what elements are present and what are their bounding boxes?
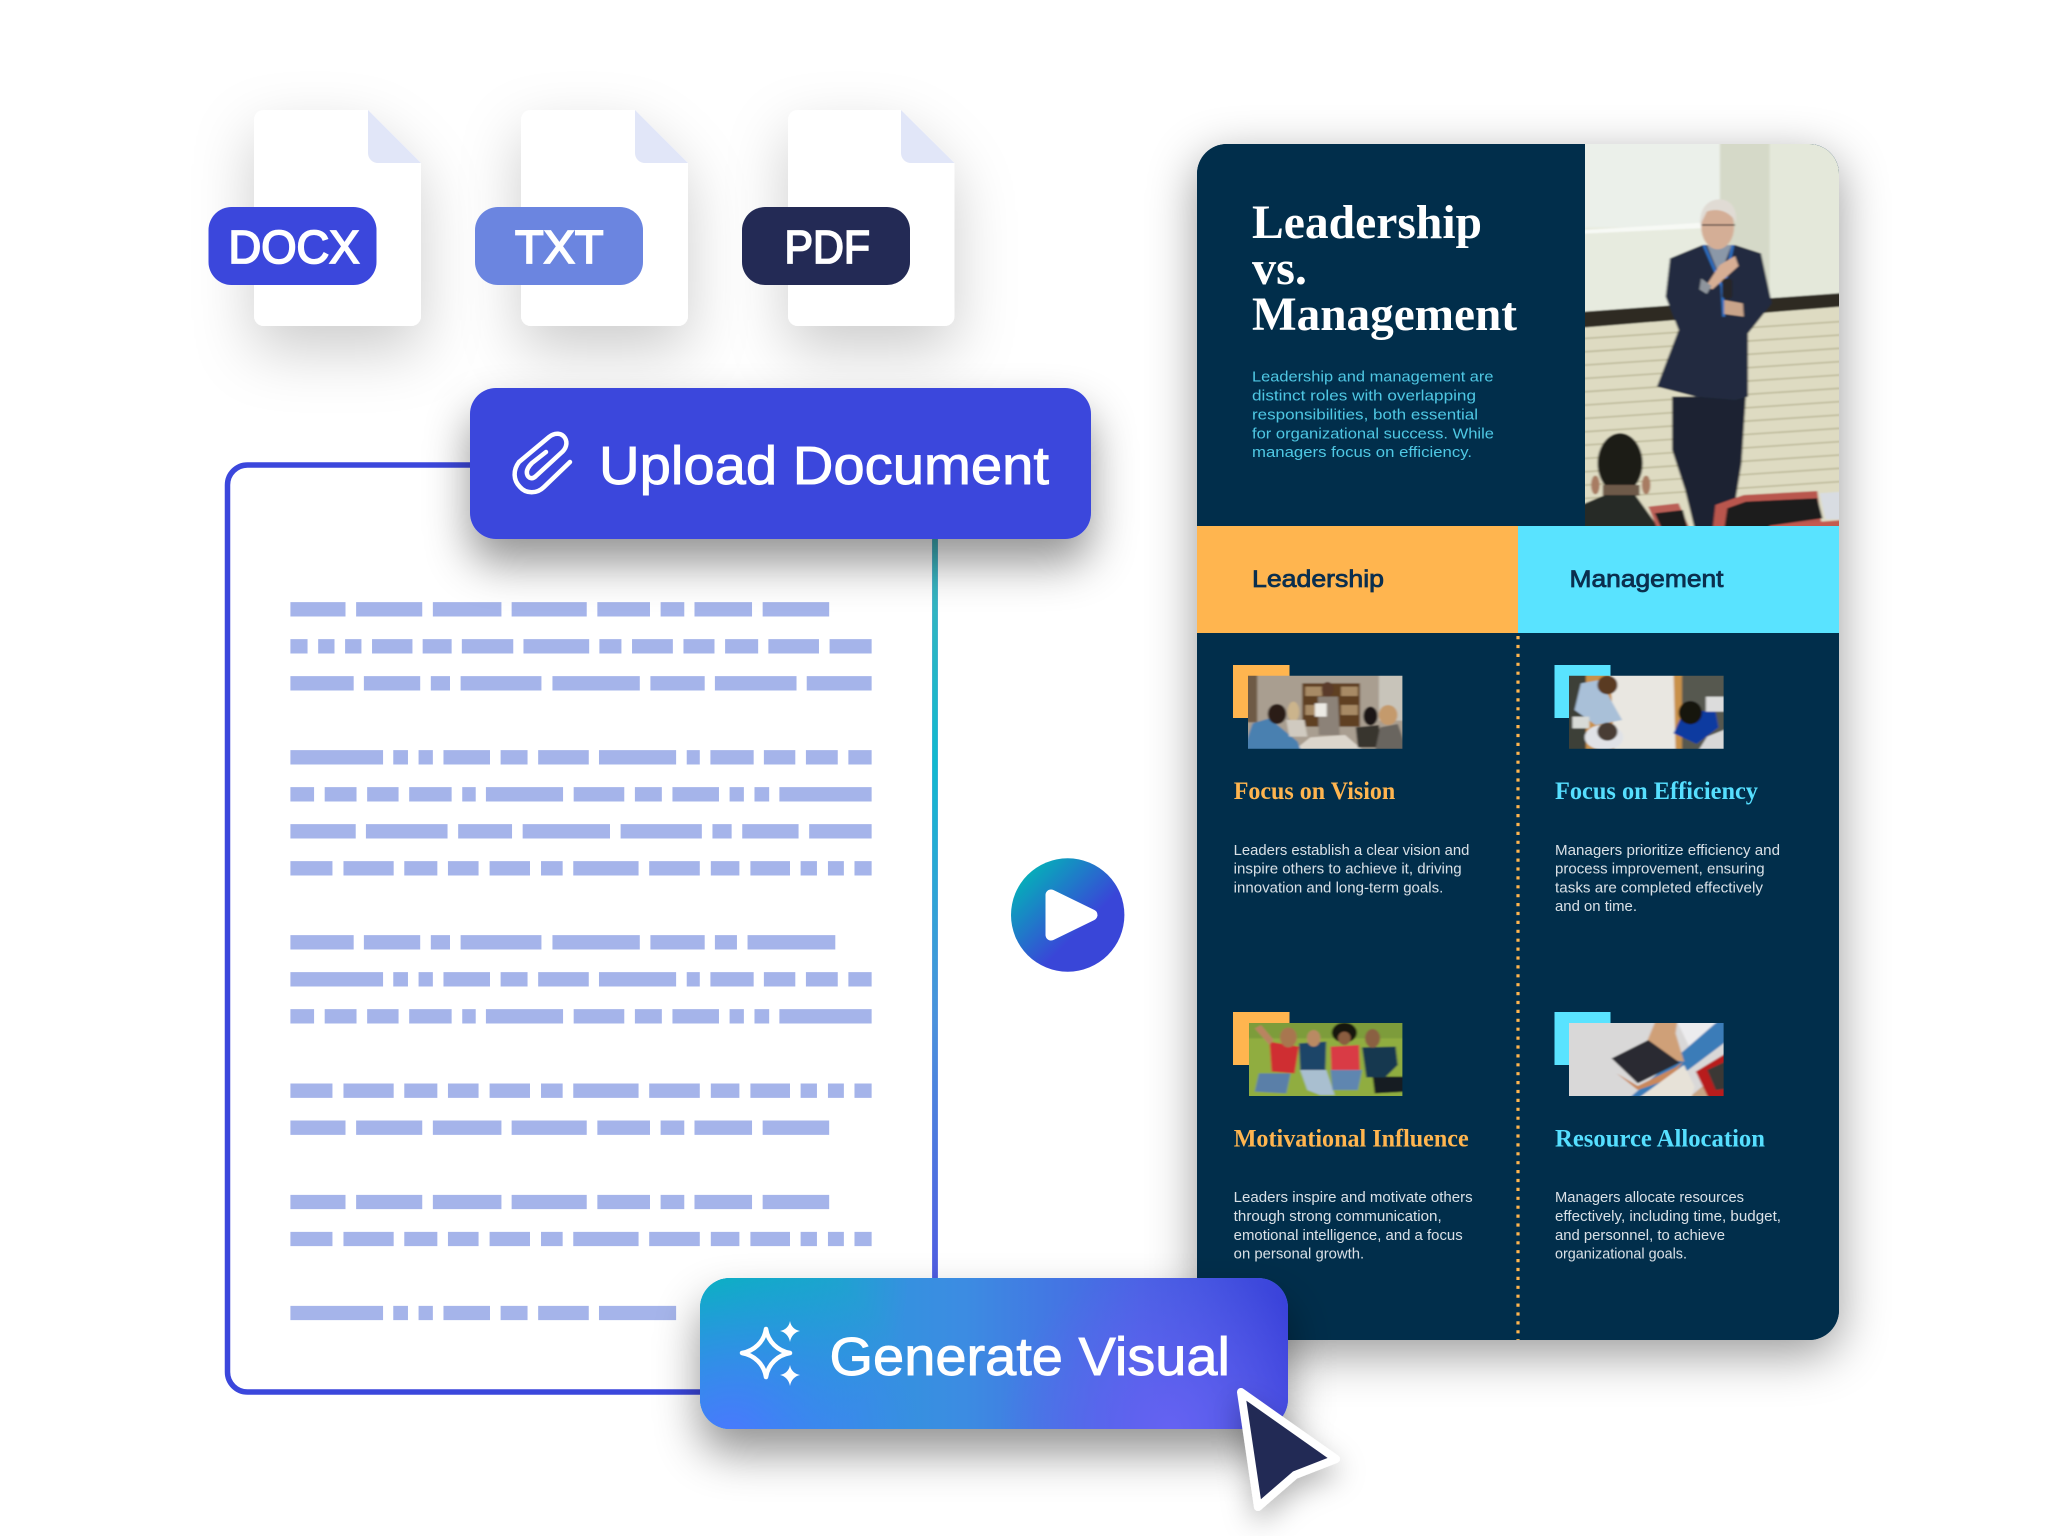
section: focus on efficiency <box>1554 665 1780 915</box>
text: efficiency description: process improvement, ensuring <box>1555 862 1765 878</box>
text: vision description <box>1234 843 1469 897</box>
icon: DOCX file <box>208 110 421 326</box>
icon: TXT file <box>475 110 688 326</box>
header band: leadership <box>1197 526 1518 633</box>
text: motivation description: Leaders inspire and motivate others <box>1234 1190 1473 1206</box>
photo: team around table from above <box>1554 665 1730 753</box>
icon: sparkles <box>742 1321 800 1386</box>
text: motivation description <box>1234 1190 1473 1263</box>
intro paragraph: responsibilities, both essential <box>1252 408 1478 424</box>
intro paragraph <box>1252 370 1494 461</box>
text: efficiency description <box>1555 843 1780 915</box>
icon: paperclip <box>515 434 570 492</box>
header band: management: Management <box>1570 566 1724 593</box>
card title <box>1252 196 1517 341</box>
card title: Leadership <box>1252 196 1482 249</box>
icon: PDF file <box>742 110 954 326</box>
text: motivation description: emotional intelligence, and a focus <box>1234 1228 1463 1244</box>
section: focus on vision <box>1233 665 1469 897</box>
intro paragraph: Leadership and management are <box>1252 370 1494 386</box>
text: motivation description: on personal growth. <box>1234 1247 1364 1263</box>
section: resource allocation <box>1554 1012 1781 1263</box>
icon: play button <box>1011 858 1124 972</box>
text: resource description <box>1555 1190 1781 1263</box>
icon: TXT file: TXT <box>515 221 604 273</box>
infographic canvas <box>208 106 1871 1530</box>
heading: motivational influence: Motivational Influence <box>1234 1126 1469 1153</box>
text: vision description: inspire others to achieve it, driving <box>1234 862 1462 878</box>
text: resource description: Managers allocate resources <box>1555 1190 1744 1206</box>
header band: leadership: Leadership <box>1252 566 1384 593</box>
card title: vs. <box>1252 242 1307 295</box>
text: efficiency description: and on time. <box>1555 899 1637 915</box>
card title: Management <box>1252 288 1517 341</box>
text: resource description: organizational goals. <box>1555 1247 1687 1263</box>
icon: PDF file: PDF <box>784 221 870 273</box>
document text placeholder lines <box>290 609 872 1313</box>
section: motivational influence <box>1233 1012 1473 1263</box>
panel: document outline <box>228 465 935 1392</box>
text: resource description: effectively, including time, budget, <box>1555 1209 1781 1225</box>
heading: focus on efficiency: Focus on Efficiency <box>1555 778 1758 805</box>
card background <box>1197 144 1839 1340</box>
heading: resource allocation: Resource Allocation <box>1555 1126 1765 1153</box>
intro paragraph: for organizational success. While <box>1252 426 1494 442</box>
generate label: Generate Visual <box>830 1327 1230 1387</box>
panel: generated infographic card <box>1197 130 1865 1340</box>
text: efficiency description: Managers prioritize efficiency and <box>1555 843 1780 859</box>
intro paragraph: distinct roles with overlapping <box>1252 388 1476 404</box>
icon: DOCX file: DOCX <box>228 221 360 273</box>
button: generate visual <box>700 1278 1288 1429</box>
photo: team meeting <box>1233 665 1408 753</box>
file type icons <box>208 110 954 326</box>
text: motivation description: through strong communication, <box>1234 1209 1442 1225</box>
button: upload document <box>470 388 1091 539</box>
text: efficiency description: tasks are completed effectively <box>1555 881 1764 897</box>
text: resource description: and personnel, to achieve <box>1555 1228 1725 1244</box>
hero photo: speaker in lecture hall <box>1585 144 1839 526</box>
photo: group sitting on grass <box>1233 1012 1408 1102</box>
intro paragraph: managers focus on efficiency. <box>1252 445 1472 461</box>
upload label: Upload Document <box>599 436 1049 496</box>
text: vision description: Leaders establish a clear vision and <box>1234 843 1469 859</box>
dotted column divider <box>1516 636 1520 1340</box>
text: vision description: innovation and long-term goals. <box>1234 881 1443 897</box>
header band: management <box>1518 526 1840 633</box>
icon: cursor arrow <box>1241 1392 1336 1507</box>
heading: focus on vision: Focus on Vision <box>1234 778 1395 805</box>
photo: calculator and papers <box>1554 1012 1730 1102</box>
